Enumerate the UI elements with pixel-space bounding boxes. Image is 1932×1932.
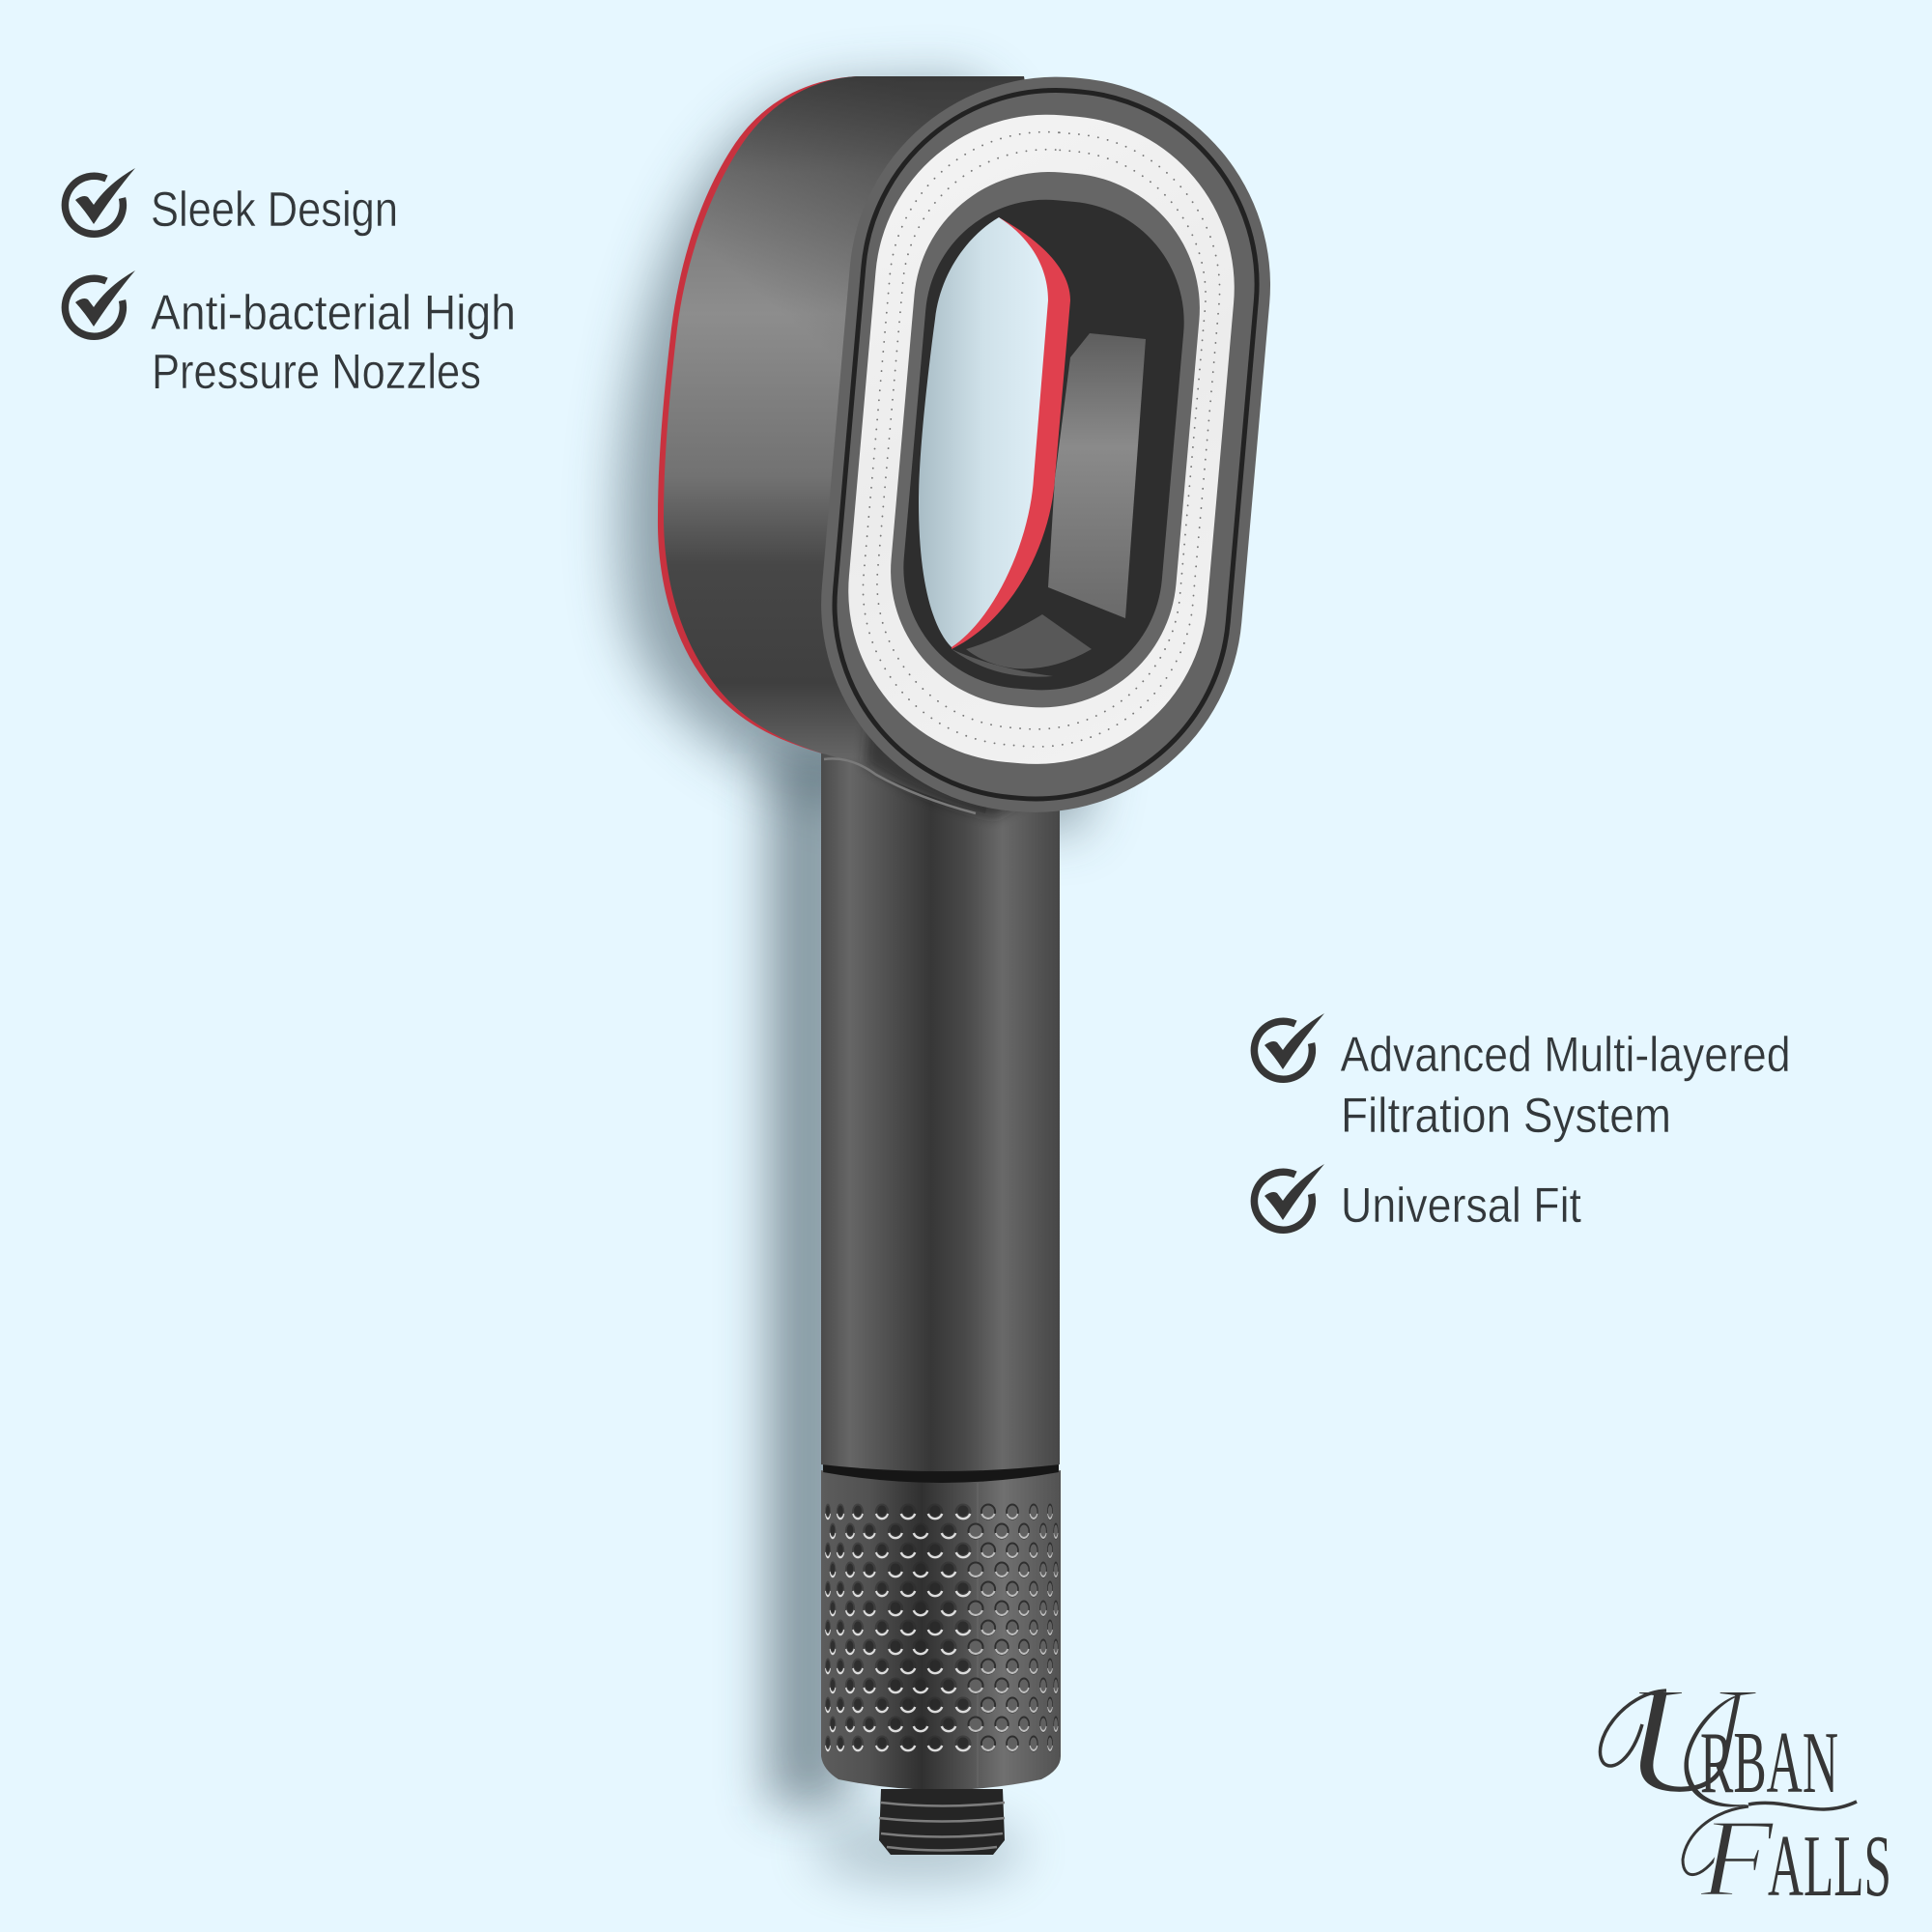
- text: Advanced Multi-layered Filtration System: [1341, 1027, 1791, 1143]
- text: Anti-bacterial High Pressure Nozzles: Pressure Nozzles: [152, 344, 481, 399]
- product shadow: [620, 82, 1159, 1883]
- icon: check mark 1: [65, 168, 135, 234]
- head body: [664, 76, 1063, 813]
- logo: Urban Falls: U: [1621, 1654, 1759, 1826]
- logo: Urban Falls: [1600, 1654, 1891, 1919]
- handle: [821, 744, 1060, 1471]
- shower head product: [658, 60, 1288, 1855]
- feature list: left: [65, 168, 516, 399]
- head body red edge: [658, 76, 1063, 753]
- text: Sleek Design: Sleek Design: [151, 182, 398, 237]
- neck shadow: [865, 720, 1024, 817]
- feature list: right: [1254, 1013, 1791, 1233]
- head face rings: [804, 60, 1288, 830]
- logo: Urban Falls: F: [1699, 1797, 1776, 1919]
- icon: check mark 4: [1254, 1164, 1324, 1230]
- gasket backing: [823, 1457, 1059, 1480]
- text: Anti-bacterial High Pressure Nozzles: Anti-bacterial High: [151, 285, 516, 340]
- text: Anti-bacterial High Pressure Nozzles: [151, 285, 516, 399]
- central opening: [919, 217, 1048, 647]
- text: Advanced Multi-layered Filtration System: Filtration System: [1341, 1088, 1671, 1143]
- text: Advanced Multi-layered Filtration System: Advanced Multi-layered: [1341, 1027, 1791, 1082]
- icon: check mark 3: [1254, 1013, 1324, 1079]
- icon: check mark 2: [65, 270, 135, 336]
- gasket: [823, 1465, 1059, 1483]
- threaded connector: [879, 1789, 1005, 1855]
- handle top edge highlight: [824, 758, 976, 813]
- red inner band: [952, 217, 1070, 649]
- cavity lower highlight: [952, 614, 1092, 677]
- filter section: [821, 1470, 1061, 1790]
- inner cavity panel: [1048, 333, 1146, 618]
- text: Universal Fit: Universal Fit: [1341, 1178, 1581, 1233]
